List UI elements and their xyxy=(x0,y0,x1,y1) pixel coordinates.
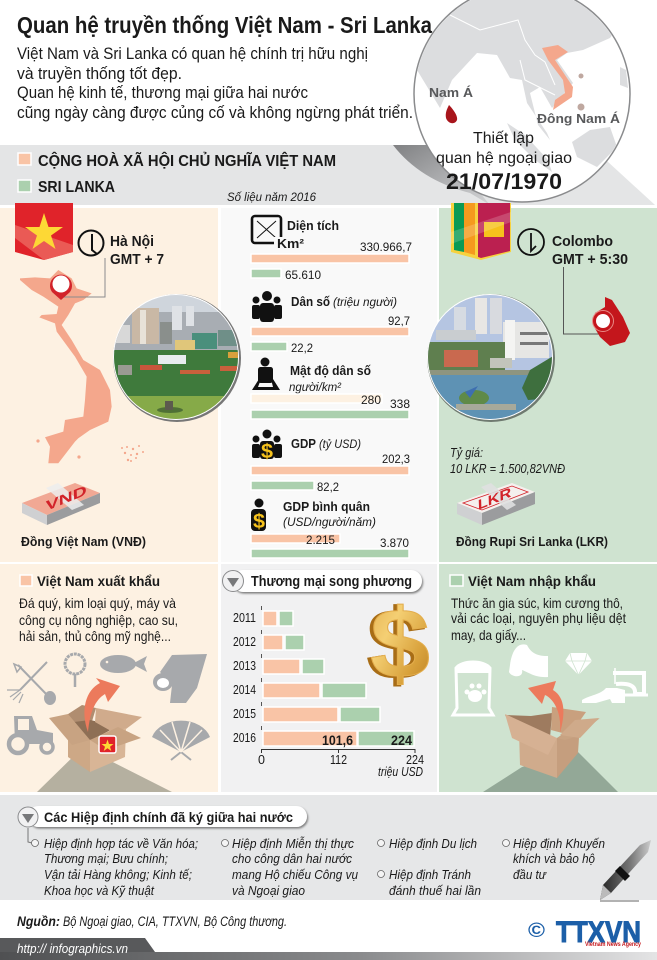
bar chart: 2015 xyxy=(233,707,256,721)
source: Bộ Ngoại giao, CIA, TTXVN, Bộ Công thương. xyxy=(63,914,287,929)
panel: bilateral trade xyxy=(221,564,437,792)
stat: population xyxy=(251,291,410,355)
stat: population: (triệu người) xyxy=(333,295,397,309)
agreement column 1 xyxy=(44,836,198,898)
agreement column 2 xyxy=(232,836,358,898)
label colombo xyxy=(552,233,628,268)
flag sri lanka xyxy=(451,203,511,260)
agreement column 1: Hiệp định hợp tác về Văn hóa; xyxy=(44,836,198,851)
bar chart: 0 xyxy=(258,753,265,767)
bar chart: 2014 xyxy=(233,683,256,697)
trade heading xyxy=(222,570,422,592)
sri lanka map xyxy=(593,297,630,346)
stat: gdp per capita: (USD/người/năm) xyxy=(283,515,376,529)
agreement column 2: Hiệp định Miễn thị thực xyxy=(232,836,354,851)
agreement column 2: cho công dân hai nước xyxy=(232,851,352,866)
vietnam on map xyxy=(542,45,573,110)
label vnd: Đồng Việt Nam (VNĐ) xyxy=(21,534,146,549)
panel: agreements xyxy=(0,795,657,900)
stat: gdp per capita: 2.215 xyxy=(306,533,335,547)
connector xyxy=(62,258,105,297)
intro text: Quan hệ kinh tế, thương mại giữa hai nước xyxy=(17,83,308,102)
label hanoi: GMT + 7 xyxy=(110,251,164,268)
logo ttxvn: Vietnam News Agency xyxy=(585,942,642,948)
intro text: cũng ngày càng được củng cố và không ngừng phát triển. xyxy=(17,103,413,122)
imports heading: Việt Nam nhập khẩu xyxy=(468,573,596,589)
icon: pen xyxy=(600,840,651,901)
stat: gdp: $ xyxy=(261,441,273,463)
bar chart: 224 xyxy=(391,732,412,748)
established relations text xyxy=(436,130,572,194)
trade heading: Thương mại song phương xyxy=(251,573,412,590)
footer bar: http:// infographics.vn xyxy=(17,941,128,956)
icon: tractor xyxy=(9,716,53,753)
agreement column 4: khích và bảo hộ xyxy=(513,851,595,866)
flag vietnam xyxy=(15,203,73,260)
footer bar xyxy=(0,938,657,960)
clock colombo xyxy=(518,229,544,255)
agreement column 4 xyxy=(513,836,605,882)
panel: vietnam xyxy=(0,203,245,562)
agreement column 2: và Ngoại giao xyxy=(232,883,305,898)
legend: CỘNG HOÀ XÃ HỘI CHỦ NGHĨA VIỆT NAM xyxy=(38,150,336,170)
imports text: Thức ăn gia súc, kim cương thô, xyxy=(451,595,623,611)
agreement column 1: Vận tải Hàng không; Kinh tế; xyxy=(44,867,192,882)
money lkr xyxy=(457,483,535,525)
money vnd: VND xyxy=(46,482,87,514)
connector xyxy=(28,828,32,843)
agreement column 4: đầu tư xyxy=(513,867,547,882)
label dong nam a: Đông Nam Á xyxy=(537,111,621,126)
map circle xyxy=(410,0,650,202)
header legend band xyxy=(0,145,655,205)
dollar symbol: $ xyxy=(367,589,427,699)
stat: gdp: (tỷ USD) xyxy=(319,437,361,451)
bullets xyxy=(32,840,510,878)
title: Quan hệ truyền thống Việt Nam - Sri Lanka xyxy=(17,12,432,38)
established relations text: quan hệ ngoại giao xyxy=(436,150,572,167)
panel: sri lanka xyxy=(425,203,657,562)
label colombo: GMT + 5:30 xyxy=(552,251,628,268)
stat: population: 92,7 xyxy=(388,314,410,328)
connector xyxy=(564,267,600,334)
agreement column 3: Hiệp định Tránh xyxy=(389,867,471,882)
agreement column 1: Khoa học và Kỹ thuật xyxy=(44,883,155,898)
panel: vietnam imports xyxy=(439,564,657,792)
stat: density: người/km² xyxy=(289,380,342,394)
icon: bead necklace xyxy=(65,654,85,687)
photo colombo xyxy=(425,290,556,425)
exports heading: Việt Nam xuất khẩu xyxy=(37,573,160,589)
stat: area: 65.610 xyxy=(285,268,321,282)
stat: gdp xyxy=(251,430,410,494)
bar chart: 2011 xyxy=(233,611,256,625)
stat: population: Dân số xyxy=(291,294,330,309)
stat: density: 338 xyxy=(390,397,410,411)
label lkr: Đồng Rupi Sri Lanka (LKR) xyxy=(456,534,608,549)
agreements heading: Các Hiệp định chính đã ký giữa hai nước xyxy=(44,809,293,825)
money vnd xyxy=(22,482,100,525)
vietnam map xyxy=(20,270,112,463)
icon: handicraft fan xyxy=(152,721,210,760)
box import xyxy=(505,681,600,778)
established relations text: Thiết lập xyxy=(473,130,534,147)
agreement column 1: Thương mại; Bưu chính; xyxy=(44,851,168,866)
stat: area: 330.966,7 xyxy=(360,240,412,254)
icon: animal feed sack xyxy=(453,662,493,715)
islands xyxy=(36,439,144,462)
bar chart: 112 xyxy=(330,753,347,767)
logo ttxvn xyxy=(528,916,642,949)
bar chart: 101,6 xyxy=(322,732,353,748)
box export xyxy=(49,678,142,772)
bar chart xyxy=(233,606,424,779)
intro text: và truyền thống tốt đẹp. xyxy=(17,64,182,83)
bar chart: 224 xyxy=(406,753,424,767)
label hanoi xyxy=(110,233,164,268)
stat: density: Mật độ dân số xyxy=(290,363,371,378)
agreements heading xyxy=(18,806,307,827)
data year note: Số liệu năm 2016 xyxy=(227,190,316,204)
icon: diamond xyxy=(565,653,592,675)
exports text: Đá quý, kim loại quý, máy và xyxy=(19,595,176,611)
exchange rate xyxy=(450,446,565,476)
stat: gdp: GDP xyxy=(291,436,316,451)
floor shadow xyxy=(37,747,172,792)
arrow export xyxy=(84,678,120,732)
stat: gdp per capita: GDP bình quân xyxy=(283,499,370,514)
agreement column 3 xyxy=(389,836,481,898)
exports text xyxy=(19,595,178,644)
exports text: công cụ nông nghiệp, cao su, xyxy=(19,612,178,628)
stat: density xyxy=(251,358,410,419)
bar chart: triệu USD xyxy=(378,765,423,779)
sri lanka on map xyxy=(446,105,457,123)
agreement column 3: đánh thuế hai lần xyxy=(389,883,481,898)
icon: rubber tapping xyxy=(153,654,207,703)
exports text: hải sản, thủ công mỹ nghệ... xyxy=(19,628,171,644)
imports text xyxy=(451,595,626,643)
agreement column 2: mang Hộ chiếu Công vụ xyxy=(232,867,358,882)
flag label xyxy=(99,736,116,753)
exchange rate: Tỷ giá: xyxy=(450,446,483,460)
label nam a: Nam Á xyxy=(429,85,474,100)
bar chart: 2012 xyxy=(233,635,256,649)
intro text xyxy=(17,44,413,122)
agreement column 3: Hiệp định Du lịch xyxy=(389,836,477,851)
stat: gdp: 82,2 xyxy=(317,480,339,494)
imports text: may, da giấy... xyxy=(451,627,526,643)
pin colombo xyxy=(592,310,614,332)
stat: gdp per capita: 3.870 xyxy=(380,536,409,550)
panel: vietnam exports xyxy=(0,564,218,792)
exchange rate: 10 LKR = 1.500,82VNĐ xyxy=(450,462,565,476)
label hanoi: Hà Nội xyxy=(110,233,154,250)
label colombo: Colombo xyxy=(552,233,613,250)
stat: gdp: 202,3 xyxy=(382,452,410,466)
panel: statistics xyxy=(221,208,437,562)
stat: density: 280 xyxy=(361,393,381,407)
agreement column 4: Hiệp định Khuyến xyxy=(513,836,605,851)
source xyxy=(17,914,287,929)
arrow import xyxy=(528,681,563,733)
dollar symbol: $ xyxy=(370,588,430,698)
imports text: vải các loại, nguyên phụ liệu dệt xyxy=(451,610,626,626)
bar chart: 2013 xyxy=(233,659,256,673)
logo ttxvn: © xyxy=(528,920,545,942)
stat: gdp per capita: $ xyxy=(253,511,265,533)
established relations text: 21/07/1970 xyxy=(446,169,562,194)
icon: farm tools xyxy=(7,662,55,704)
icon: fabric roll xyxy=(509,644,548,677)
floor shadow xyxy=(483,752,618,792)
legend: SRI LANKA xyxy=(38,179,115,196)
stat: area xyxy=(251,216,412,282)
small islands on map xyxy=(578,74,584,110)
icon: fish xyxy=(100,655,147,673)
stat: area: Diện tích xyxy=(287,218,339,233)
photo hanoi xyxy=(113,294,241,422)
icon: sewing machine xyxy=(611,668,648,695)
stat: area: Km² xyxy=(277,236,305,251)
source: Nguồn: xyxy=(17,914,60,929)
stat: population: 22,2 xyxy=(291,341,313,355)
stat: gdp per capita xyxy=(251,498,409,558)
legend xyxy=(18,150,336,196)
bar chart: 2016 xyxy=(233,731,256,745)
logo ttxvn: TTXVN xyxy=(556,916,641,949)
intro text: Việt Nam và Sri Lanka có quan hệ chính trị hữu nghị xyxy=(17,44,368,63)
money lkr: LKR xyxy=(478,484,512,513)
icon: shoe xyxy=(582,688,625,703)
clock hanoi xyxy=(78,230,104,256)
pin hanoi xyxy=(50,275,72,300)
